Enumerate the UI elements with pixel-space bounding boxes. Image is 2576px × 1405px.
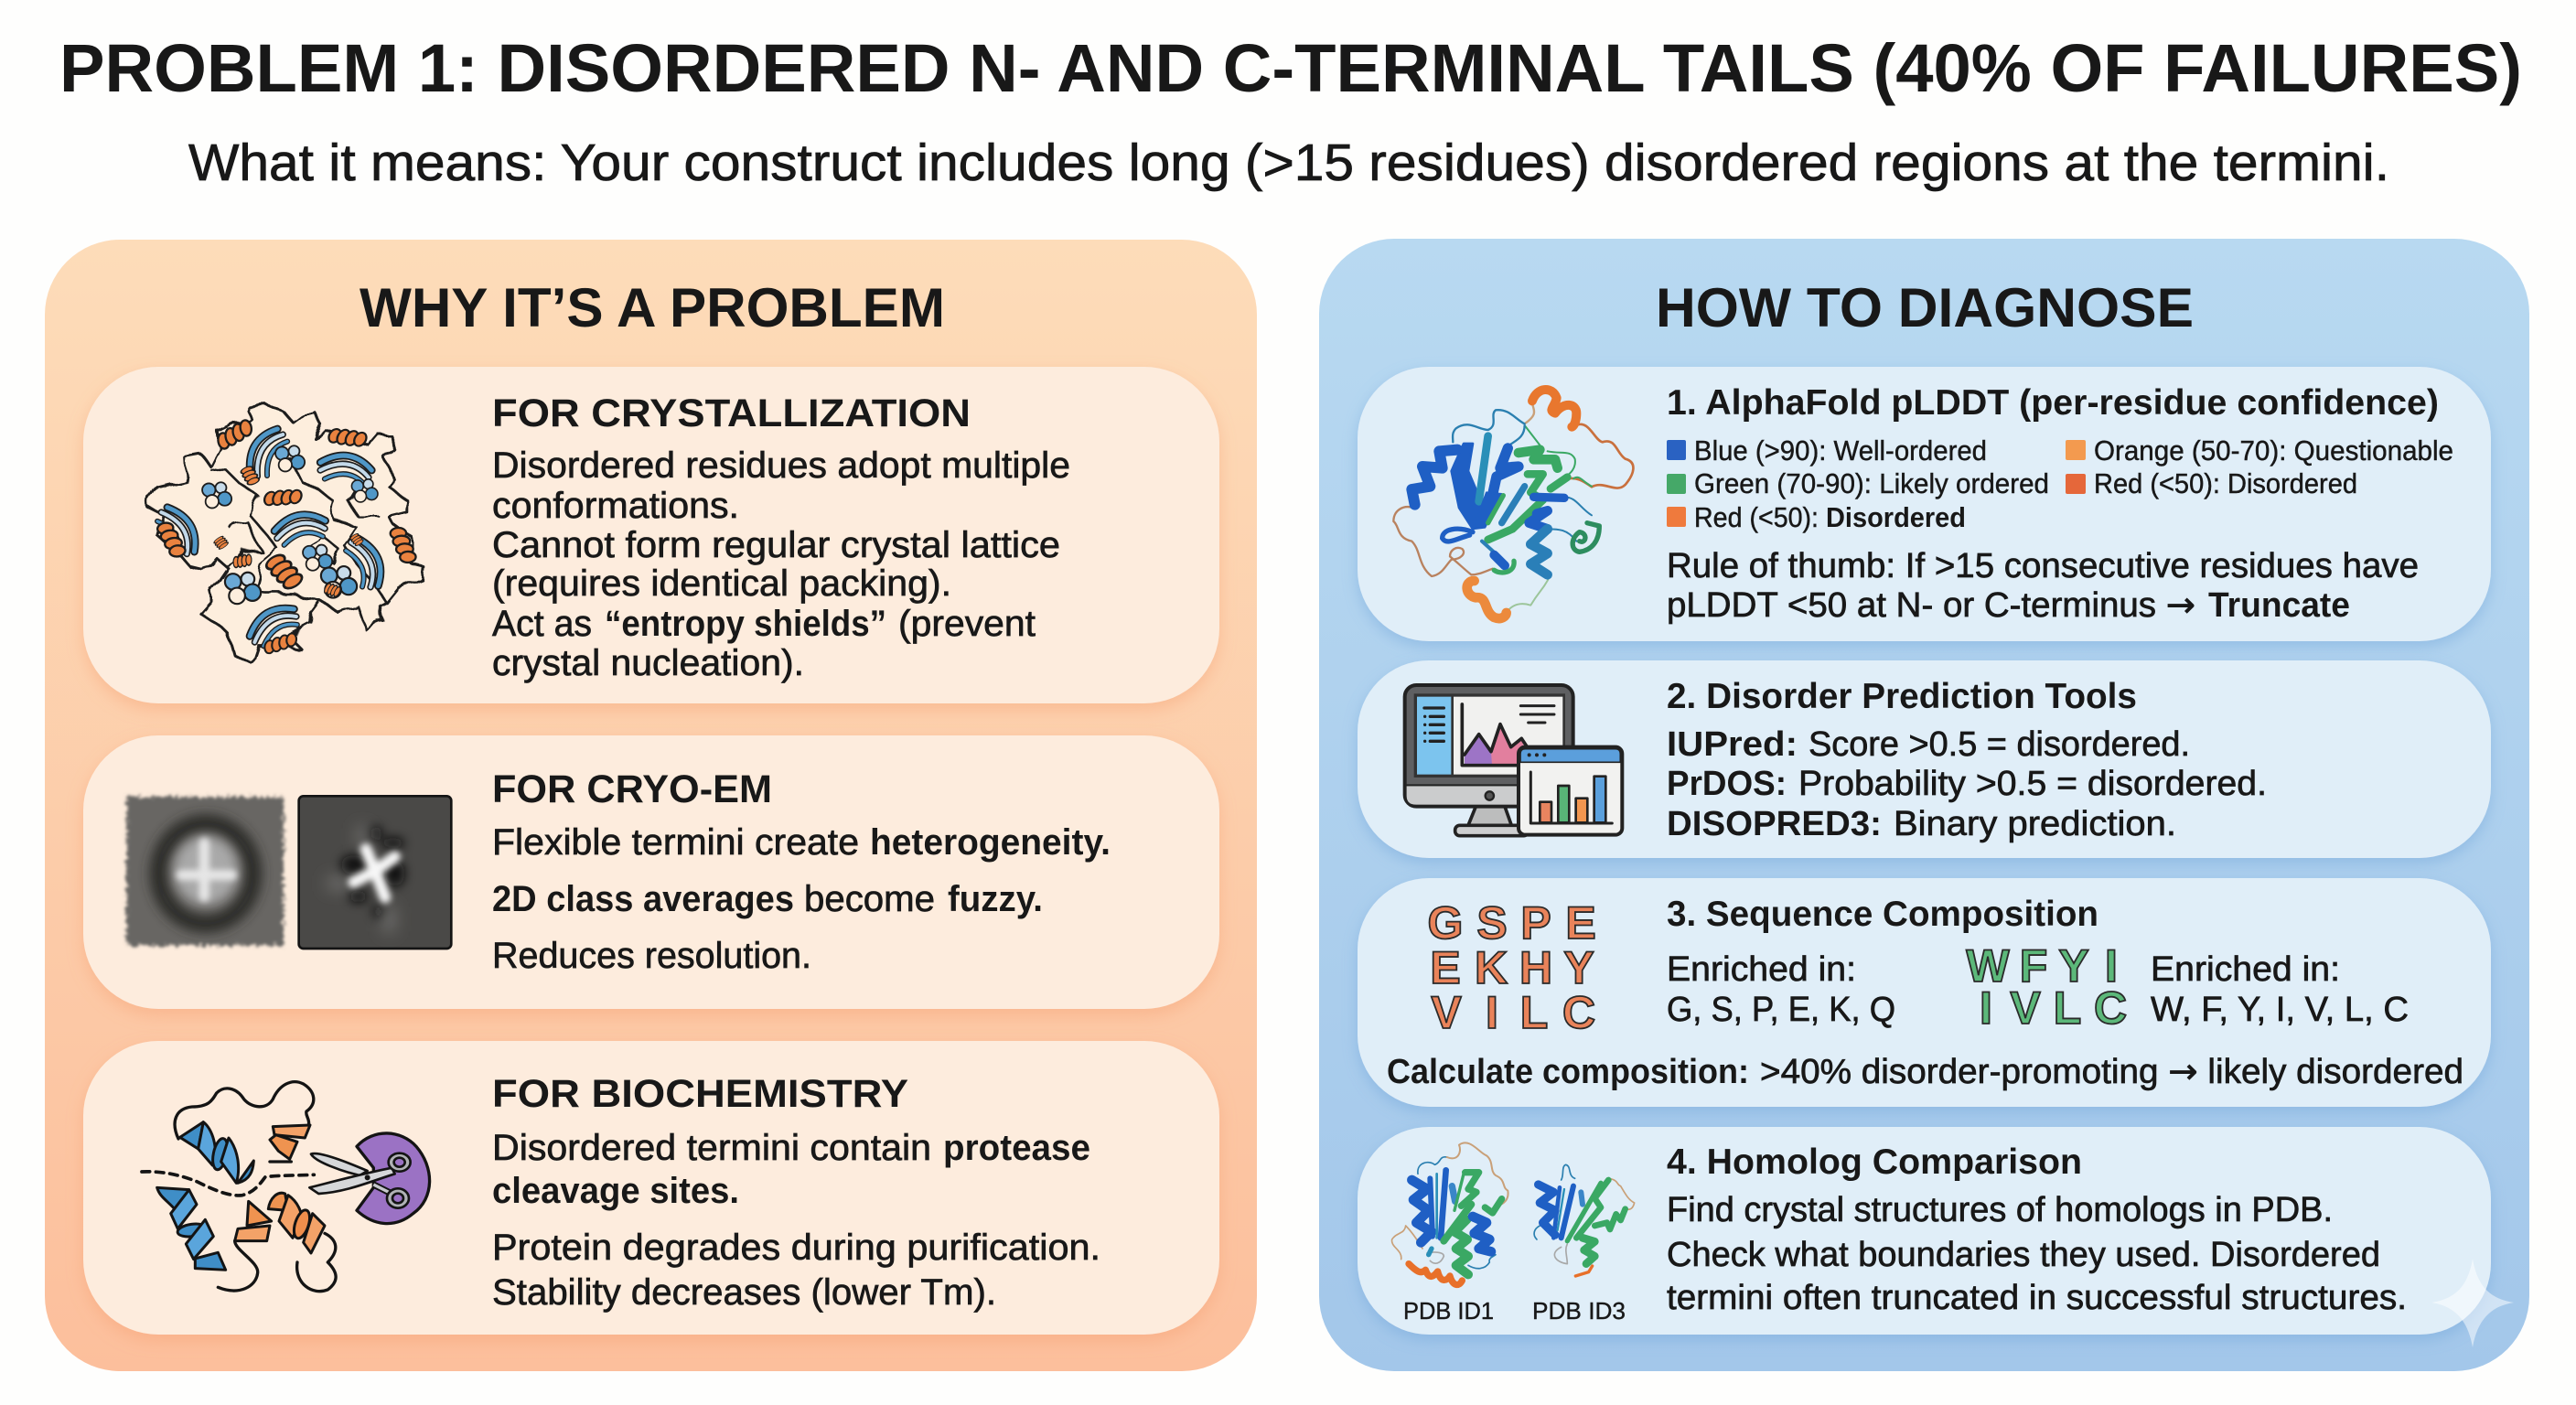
icon: scissors	[309, 1153, 411, 1208]
label: PDB ID1: PDB ID1	[1403, 1297, 1494, 1325]
text: crystallization explanation: (prevent	[898, 604, 1036, 644]
heading: alphafold plddt: 1. AlphaFold pLDDT (per-residue confidence)	[1667, 383, 2439, 423]
text: rule of thumb: Rule of thumb: If >15 consecutive residues have	[1667, 547, 2419, 585]
legend: plddt colours: Orange (50-70): Questionable	[2094, 434, 2453, 467]
text: homolog comparison explanation	[1667, 1191, 2407, 1317]
text: prediction tools list: Binary prediction.	[1894, 805, 2176, 843]
card: disorder prediction tools	[1358, 660, 2491, 858]
heading: for cryo-em: FOR CRYO-EM	[492, 767, 772, 811]
text: homolog comparison explanation: termini often truncated in successful structures.	[1667, 1279, 2407, 1317]
panel: why it's a problem	[45, 240, 1257, 1371]
text: order-promoting residues	[2151, 950, 2409, 1029]
icon: purple protease	[357, 1133, 430, 1224]
text: crystallization explanation: (requires identical packing).	[492, 563, 951, 604]
text: crystallization explanation: Act as	[492, 604, 592, 644]
icon: order-promoting residue letters: IVLC	[1980, 982, 2127, 1034]
heading: homolog comparison: 4. Homolog Comparison	[1667, 1142, 2082, 1182]
text: disorder-promoting residues	[1667, 950, 1895, 1029]
text: crystallization explanation: Cannot form regular crystal lattice	[492, 525, 1060, 565]
icon: disorder-promoting residue letters: VILC	[1431, 987, 1595, 1038]
icon: protein crystal packing	[146, 404, 424, 665]
text: biochemistry explanation: Protein degrades during purification.	[492, 1228, 1100, 1268]
text: rule of thumb: Truncate	[2208, 586, 2350, 625]
text: biochemistry explanation: protease	[943, 1128, 1090, 1168]
text: biochemistry explanation: Stability decreases (lower Tm).	[492, 1272, 996, 1313]
heading: for biochemistry: FOR BIOCHEMISTRY	[492, 1072, 908, 1116]
heading: disorder prediction tools: 2. Disorder Prediction Tools	[1667, 677, 2137, 716]
text: prediction tools list: IUPred:	[1667, 725, 1798, 764]
text: homolog comparison explanation: Check what boundaries they used. Disordered	[1667, 1236, 2380, 1274]
panel heading: why it's a problem: WHY IT’S A PROBLEM	[360, 277, 945, 338]
heading: sequence composition: 3. Sequence Composition	[1667, 895, 2098, 934]
text: crystallization explanation: Disordered residues adopt multiple	[492, 445, 1070, 486]
card: alphafold plddt	[1358, 367, 2491, 641]
text: biochemistry explanation: Disordered termini contain	[492, 1128, 931, 1168]
text: crystallization explanation: “entropy shields”	[605, 604, 886, 644]
legend: plddt colours: Red (<50): Disordered	[2094, 467, 2357, 499]
label: PDB ID3: PDB ID3	[1532, 1297, 1626, 1325]
text: crystallization explanation: crystal nucleation).	[492, 643, 804, 683]
heading: for crystallization: FOR CRYSTALLIZATION	[492, 391, 971, 435]
icon: alphafold structure coloured by confidence	[1393, 390, 1633, 618]
text: prediction tools list: DISOPRED3:	[1667, 805, 1882, 843]
title: PROBLEM 1: DISORDERED N- AND C-TERMINAL TAILS (40% OF FAILURES)	[59, 30, 2522, 106]
icon: computer with prediction charts	[1405, 685, 1622, 836]
text: prediction tools list	[1667, 725, 2267, 843]
text: cryo-em explanation: Flexible termini create	[492, 822, 859, 863]
icon: order-promoting residue letters: WFYI	[1966, 940, 2118, 992]
icon: disorder-promoting residue letters: EKHY	[1430, 942, 1594, 993]
legend: plddt colours: Red (<50):	[1694, 501, 1819, 533]
legend: plddt colours	[1667, 434, 2453, 533]
text: prediction tools list: PrDOS:	[1667, 765, 1787, 803]
card: for biochemistry	[83, 1041, 1219, 1335]
icon: protease cutting a disordered tail	[142, 1082, 430, 1292]
text: disorder-promoting residues: Enriched in:	[1667, 950, 1856, 989]
panel heading: how to diagnose: HOW TO DIAGNOSE	[1656, 277, 2194, 338]
text: biochemistry explanation: cleavage sites.	[492, 1171, 739, 1211]
text: prediction tools list: Score >0.5 = disordered.	[1809, 725, 2190, 764]
text: cryo-em explanation: heterogeneity.	[870, 822, 1111, 863]
text: rule of thumb	[1667, 547, 2419, 625]
text: calculate composition	[1387, 1051, 2463, 1091]
icon: sharp 2D class average	[299, 796, 451, 949]
icon: sparkle watermark	[2431, 1259, 2514, 1347]
icon: homolog structure PDB ID3	[1534, 1164, 1635, 1276]
text: calculate composition: Calculate composition:	[1387, 1053, 1749, 1091]
text: calculate composition: >40% disorder-promoting → likely disordered	[1760, 1051, 2463, 1091]
legend: plddt colours: Disordered	[1826, 501, 1966, 533]
text: cryo-em explanation	[492, 822, 1111, 976]
legend: plddt colours: Blue (>90): Well-ordered	[1694, 434, 1987, 467]
text: crystallization explanation	[492, 445, 1070, 683]
icon: homolog structure PDB ID1	[1392, 1142, 1508, 1284]
text: biochemistry explanation	[492, 1128, 1100, 1313]
text: rule of thumb: pLDDT <50 at N- or C-terminus →	[1667, 585, 2195, 625]
card: homolog comparison	[1358, 1127, 2491, 1335]
text: homolog comparison explanation: Find crystal structures of homologs in PDB.	[1667, 1191, 2333, 1229]
legend: plddt colours: Green (70-90): Likely ordered	[1694, 467, 2049, 499]
icon: order-promoting residue letters	[1966, 940, 2127, 1034]
card: sequence composition	[1358, 878, 2491, 1107]
subtitle: What it means: Your construct includes long (>15 residues) disordered regions at the termini.	[188, 134, 2389, 192]
text: prediction tools list: Probability >0.5 = disordered.	[1798, 765, 2267, 803]
text: order-promoting residues: Enriched in:	[2151, 950, 2340, 989]
text: cryo-em explanation: Reduces resolution.	[492, 936, 811, 976]
icon: fuzzy 2D class average	[126, 797, 284, 946]
text: cryo-em explanation: become	[804, 879, 935, 919]
text: cryo-em explanation: 2D class averages	[492, 879, 794, 919]
text: cryo-em explanation: fuzzy.	[948, 879, 1043, 919]
panel: how to diagnose	[1319, 239, 2529, 1371]
text: crystallization explanation: conformations.	[492, 486, 739, 526]
card: for crystallization	[83, 367, 1219, 703]
text: order-promoting residues: W, F, Y, I, V, L, C	[2151, 991, 2409, 1029]
text: disorder-promoting residues: G, S, P, E, K, Q	[1667, 991, 1895, 1029]
icon: disorder-promoting residue letters	[1428, 897, 1596, 1038]
card: for cryo-em	[83, 735, 1219, 1009]
icon: disorder-promoting residue letters: GSPE	[1428, 897, 1596, 949]
